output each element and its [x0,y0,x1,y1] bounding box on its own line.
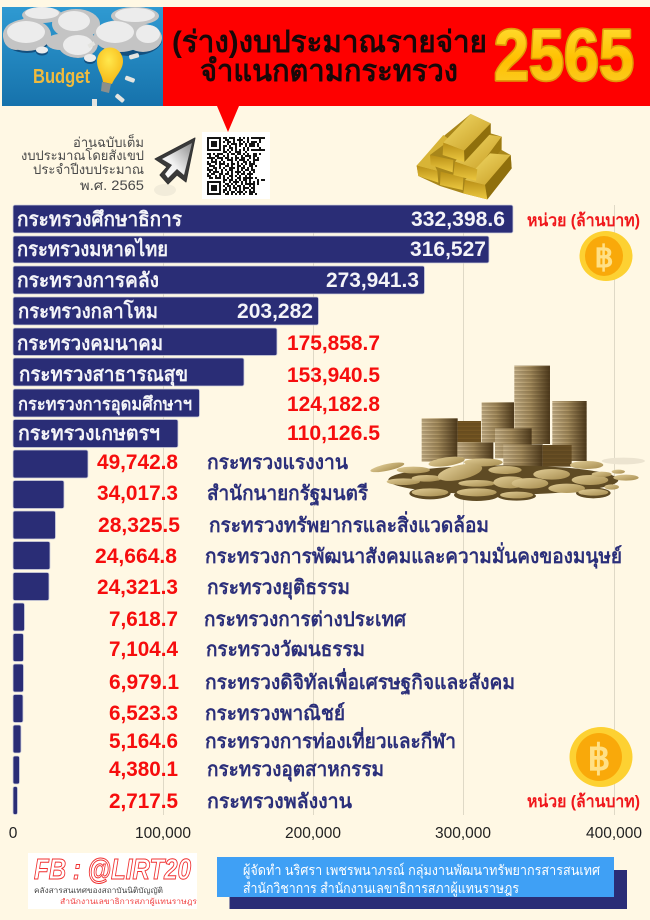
icon: coin top [580,231,632,281]
icon: coin pile [370,366,645,501]
lower ministries: 34,017.3 [97,482,178,505]
lower ministries: กระทรวงการต่างประเทศ [204,609,407,631]
red title panel [163,7,650,132]
title [172,26,487,88]
red values beside bars: 175,858.7 [287,332,380,355]
red values beside bars: 124,182.8 [287,393,380,416]
x axis labels: 100,000 [135,825,191,842]
icon: coin bottom: ฿ [588,737,610,778]
labels inside bars [17,208,505,445]
facebook badge: FB : @LIRT20 [34,854,191,886]
lower ministries [95,451,622,813]
QR note text: พ.ศ. 2565 [80,178,144,193]
labels inside bars: 316,527 [410,238,486,261]
x axis labels: 200,000 [285,825,341,842]
icon: gold bars [417,114,512,199]
credit box: สำนักวิชาการ สำนักงานเลขาธิการสภาผู้แทนราษฎร [243,880,519,897]
facebook badge: คลังสารสนเทศของสถาบันนิติบัญญัติ [34,886,163,895]
labels inside bars: กระทรวงศึกษาธิการ [17,209,182,231]
labels inside bars: กระทรวงการคลัง [17,270,159,292]
QR note text: ประจำปีงบประมาณ [33,162,144,177]
icon: coin top: ฿ [594,241,614,274]
QR note text [21,133,144,193]
lower ministries: กระทรวงดิจิทัลเพื่อเศรษฐกิจและสังคม [205,667,515,696]
icon: coin bottom [570,727,632,787]
budget illustration [2,7,163,106]
unit label top: หน่วย (ล้านบาท) [527,211,640,230]
bar chart [13,205,513,814]
icon: cursor arrow [154,138,195,196]
light bulb [97,48,123,93]
facebook badge: สำนักงานเลขาธิการสภาผู้แทนราษฎร [60,897,197,906]
lower ministries: กระทรวงพาณิชย์ [205,702,345,725]
labels inside bars: กระทรวงกลาโหม [18,299,158,323]
lower ministries: สำนักนายกรัฐมนตรี [207,482,368,507]
labels inside bars: 332,398.6 [411,208,505,231]
lower ministries: กระทรวงการพัฒนาสังคมและความมั่นคงของมนุษย์ [205,541,622,569]
lower ministries: กระทรวงทรัพยากรและสิ่งแวดล้อม [209,510,489,537]
lower ministries: 24,321.3 [97,576,178,599]
budget word: Budget [33,66,90,88]
lower ministries: 7,104.4 [109,638,178,661]
title: (ร่าง)งบประมาณรายจ่าย [172,26,487,59]
labels inside bars: กระทรวงมหาดไทย [17,237,168,261]
lower ministries: กระทรวงวัฒนธรรม [206,639,365,661]
QR note text: อ่านฉบับเต็ม [73,133,144,150]
QR code [202,132,270,199]
lower ministries: กระทรวงพลังงาน [207,791,352,813]
lower ministries: 4,380.1 [109,758,178,781]
red values beside bars [287,332,380,445]
labels inside bars: กระทรวงเกษตรฯ [18,423,160,445]
x axis labels: 300,000 [435,825,491,842]
lower ministries: 6,979.1 [109,671,179,694]
x axis labels [9,825,642,842]
labels inside bars: กระทรวงคมนาคม [17,333,163,355]
lower ministries: 49,742.8 [97,451,178,474]
labels inside bars: กระทรวงสาธารณสุข [19,364,188,387]
lower ministries: 28,325.5 [98,514,180,537]
lower ministries: กระทรวงยุติธรรม [207,577,350,600]
lower ministries: 7,618.7 [109,608,178,631]
lower ministries: กระทรวงการท่องเที่ยวและกีฬา [205,726,456,753]
year 2565: 2565 [494,16,634,96]
credit box: ผู้จัดทำ นริศรา เพชรพนาภรณ์ กลุ่มงานพัฒนาทรัพยากรสารสนเทศ [243,862,600,879]
lower ministries: กระทรวงแรงงาน [207,452,348,474]
lower ministries: 2,717.5 [109,790,178,813]
unit label bottom: หน่วย (ล้านบาท) [527,792,640,811]
labels inside bars: กระทรวงการอุดมศึกษาฯ [18,394,192,416]
labels inside bars: 273,941.3 [326,269,419,292]
title: จำแนกตามกระทรวง [200,55,458,88]
lower ministries: กระทรวงอุตสาหกรรม [207,759,384,782]
labels inside bars: 203,282 [237,300,313,323]
header banner [2,7,650,132]
lower ministries: 6,523.3 [109,702,178,725]
lower ministries: 24,664.8 [95,545,177,568]
credit box [217,857,627,909]
red values beside bars: 110,126.5 [287,422,380,445]
x axis labels: 400,000 [586,825,642,842]
QR note text: งบประมาณโดยสังเขป [21,147,144,163]
x axis labels: 0 [9,825,18,842]
facebook badge [28,853,197,909]
red values beside bars: 153,940.5 [287,364,380,387]
gridlines [164,205,614,815]
lower ministries: 5,164.6 [109,730,178,753]
